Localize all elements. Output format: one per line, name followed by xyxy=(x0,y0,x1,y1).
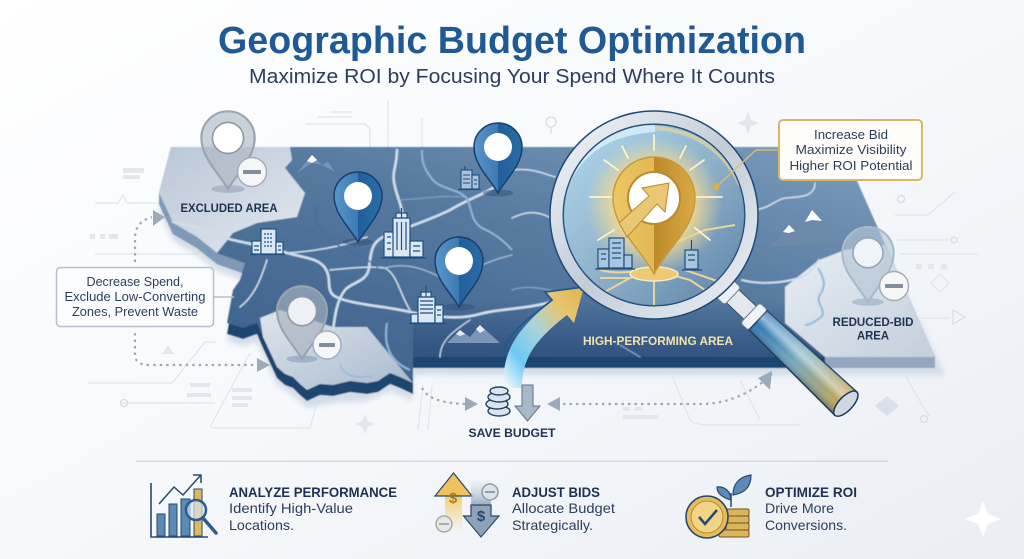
icon: optimize roi xyxy=(686,475,751,538)
text: optimize roi: OPTIMIZE ROI xyxy=(765,484,857,500)
pin: low converting xyxy=(277,286,327,363)
callout: increase bid: Higher ROI Potential xyxy=(790,159,912,173)
icon: adjust bids xyxy=(435,473,499,537)
callout: increase bid: Increase Bid xyxy=(814,128,888,142)
icon: minus low converting xyxy=(313,331,341,359)
map surface xyxy=(159,147,935,390)
gold pin center xyxy=(628,172,680,224)
arrow outline xyxy=(503,287,584,353)
callout: increase bid xyxy=(779,120,922,180)
excluded region xyxy=(159,147,305,253)
icon: adjust bids: $ xyxy=(477,508,486,525)
text: reduced-bid area: AREA xyxy=(857,330,889,342)
text: adjust bids: Strategically. xyxy=(512,517,593,533)
lens xyxy=(564,125,744,305)
magnifier xyxy=(550,111,862,420)
gold pin xyxy=(613,157,695,274)
text: adjust bids: ADJUST BIDS xyxy=(512,484,600,500)
subtitle: Maximize ROI by Focusing Your Spend Where It Counts xyxy=(249,66,775,88)
map lower shade xyxy=(413,300,830,357)
arrow heads xyxy=(153,210,772,411)
icon: minus excluded xyxy=(238,158,266,186)
callout: decrease spend xyxy=(56,268,234,326)
text: save budget: SAVE BUDGET xyxy=(468,428,556,440)
arrow: budget to high performing xyxy=(503,287,584,388)
icon: save budget arrow xyxy=(515,385,540,421)
gold arrow xyxy=(619,183,669,237)
arrow: dotted paths xyxy=(135,217,772,404)
icon: city in lens xyxy=(595,238,635,269)
decorative circuit lines xyxy=(88,100,978,430)
icon: adjust bids: $ xyxy=(449,490,458,507)
text: high-performing area: HIGH-PERFORMING AREA xyxy=(583,336,733,348)
divider xyxy=(136,460,888,462)
pin: blue 3 xyxy=(435,237,483,310)
pin: blue 2 xyxy=(474,123,522,196)
icon: small tower in lens xyxy=(682,240,702,270)
map depth light left xyxy=(159,193,245,274)
text: optimize roi: Drive More xyxy=(765,500,834,516)
callout: decrease spend: Zones, Prevent Waste xyxy=(72,305,198,319)
icon: minus reduced-bid xyxy=(880,272,908,300)
map depth side xyxy=(159,158,935,401)
decorative ends xyxy=(120,117,965,422)
callout: decrease spend: Exclude Low-Converting xyxy=(64,290,206,304)
pin: reduced-bid xyxy=(842,227,894,306)
text: adjust bids: Allocate Budget xyxy=(512,500,615,516)
roads xyxy=(173,130,819,357)
icon: analyze performance xyxy=(151,475,216,537)
text: optimize roi: Conversions. xyxy=(765,517,847,533)
reduced-bid region xyxy=(785,245,935,357)
callout connector xyxy=(712,150,779,190)
text: reduced-bid area: REDUCED-BID xyxy=(832,317,914,329)
lower left region xyxy=(260,310,413,390)
map depth right lighter xyxy=(825,357,935,368)
callout: decrease spend: Decrease Spend, xyxy=(86,275,184,289)
callout: increase bid: Maximize Visibility xyxy=(796,143,907,157)
rivers xyxy=(316,150,824,377)
title: Geographic Budget Optimization xyxy=(218,20,806,62)
mountains xyxy=(297,155,842,343)
text: analyze performance: Identify High-Value xyxy=(229,500,353,516)
building 4 xyxy=(409,285,446,324)
building 1 xyxy=(250,229,285,254)
text: analyze performance: Locations. xyxy=(229,517,294,533)
pin: blue 1 xyxy=(334,172,382,246)
text: excluded area: EXCLUDED AREA xyxy=(180,203,278,215)
map shadow xyxy=(159,165,945,408)
map xyxy=(159,130,945,408)
text: analyze performance: ANALYZE PERFORMANCE xyxy=(229,484,397,500)
ring xyxy=(550,111,758,319)
icon: save budget coins xyxy=(486,387,510,416)
building 3 xyxy=(458,166,481,190)
pin: excluded xyxy=(201,111,255,193)
building 2 xyxy=(380,208,426,258)
handle xyxy=(713,276,862,420)
decorative small marks xyxy=(90,112,1001,537)
